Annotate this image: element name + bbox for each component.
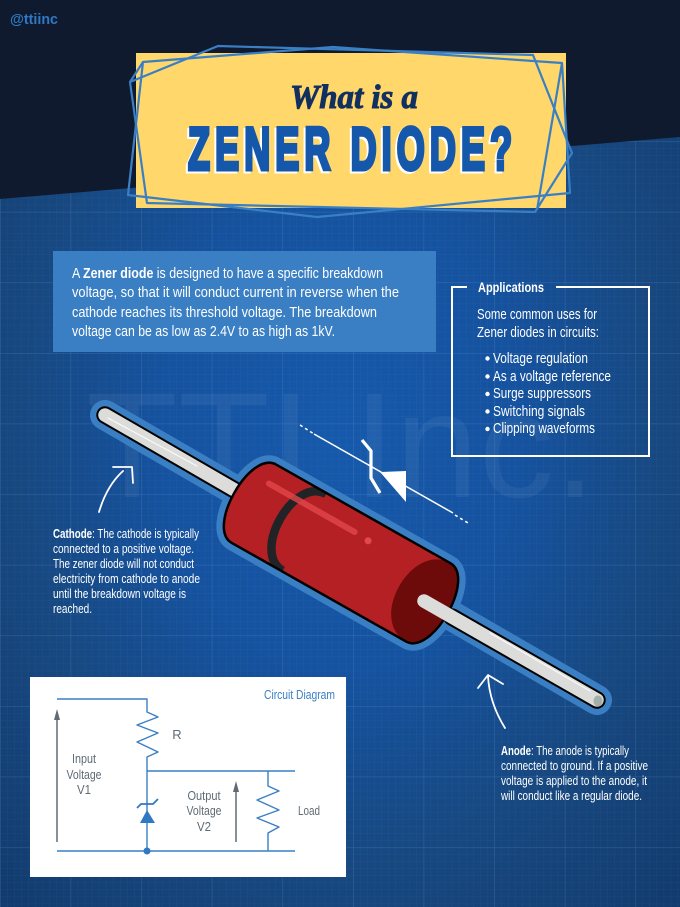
handle: @ttiinc [10, 11, 58, 28]
anode lead [424, 601, 602, 706]
cathode caption: connected to a positive voltage. [53, 542, 194, 556]
anode caption: connected to ground. If a positive [501, 759, 648, 773]
cathode caption: reached. [53, 602, 92, 616]
circuit labels: Output [188, 788, 221, 803]
title line 1: What is a [290, 79, 418, 116]
title frame [128, 46, 572, 217]
circuit labels: Input [72, 751, 96, 766]
cathode caption: Cathode: The cathode is typically [53, 527, 200, 541]
anode arrow [478, 675, 505, 728]
anode caption: voltage is applied to the anode, it [501, 774, 647, 788]
intro text panel: A Zener diode is designed to have a specific breakdown [72, 265, 383, 282]
end cap [377, 547, 470, 652]
applications list: Switching signals [493, 403, 585, 420]
circuit labels: Load [298, 803, 320, 818]
body stroke [212, 454, 470, 652]
applications list: Voltage regulation [493, 350, 588, 367]
circuit labels [66, 727, 320, 834]
circuit labels: Voltage [186, 803, 222, 818]
cathode caption: The zener diode will not conduct [53, 557, 194, 571]
applications intro [477, 306, 599, 341]
voltage arrows [54, 709, 239, 842]
intro text panel: cathode reaches its threshold voltage. The breakdown [72, 304, 377, 321]
anode caption: Anode: The anode is typically [501, 744, 630, 758]
cathode arrow [99, 467, 133, 512]
highlight [269, 483, 355, 532]
intro text panel: voltage, so that it will conduct current in reverse when the [72, 284, 399, 301]
band [267, 487, 326, 570]
diode body [222, 461, 460, 645]
circuit labels: V2 [197, 819, 211, 834]
applications intro: Zener diodes in circuits: [477, 324, 599, 341]
circuit wiring [57, 699, 295, 851]
title panel [128, 46, 572, 217]
title line 2: ZENER DIODE? [188, 116, 517, 183]
applications heading: Applications [478, 279, 544, 295]
applications list: Surge suppressors [493, 385, 591, 402]
circuit title: Circuit Diagram [264, 688, 335, 702]
circuit labels: R [172, 727, 182, 742]
anode caption: will conduct like a regular diode. [500, 789, 642, 803]
applications list: Clipping waveforms [493, 420, 595, 437]
diode illustration [105, 415, 602, 706]
circuit diagram panel [30, 677, 346, 877]
applications intro: Some common uses for [477, 306, 597, 323]
zener symbol [300, 425, 468, 523]
circuit labels: V1 [77, 782, 91, 797]
cathode caption: electricity from cathode to anode [53, 572, 200, 586]
diode outer outline [105, 415, 597, 700]
zener diode symbol [137, 799, 158, 854]
anode caption [500, 744, 648, 803]
cathode caption: until the breakdown voltage is [53, 587, 186, 601]
cathode lead [105, 415, 245, 496]
title line 2: ZENER DIODE? [186, 118, 515, 185]
applications list: As a voltage reference [493, 368, 611, 385]
cathode caption [53, 527, 200, 616]
intro text panel [53, 251, 436, 352]
intro text panel: voltage can be as low as 2.4V to as high as 1kV. [72, 323, 335, 340]
circuit labels: Voltage [66, 767, 102, 782]
applications panel [452, 279, 649, 456]
dark header band [0, 0, 680, 199]
watermark: TTI Inc. [86, 361, 596, 529]
applications list [485, 350, 611, 437]
